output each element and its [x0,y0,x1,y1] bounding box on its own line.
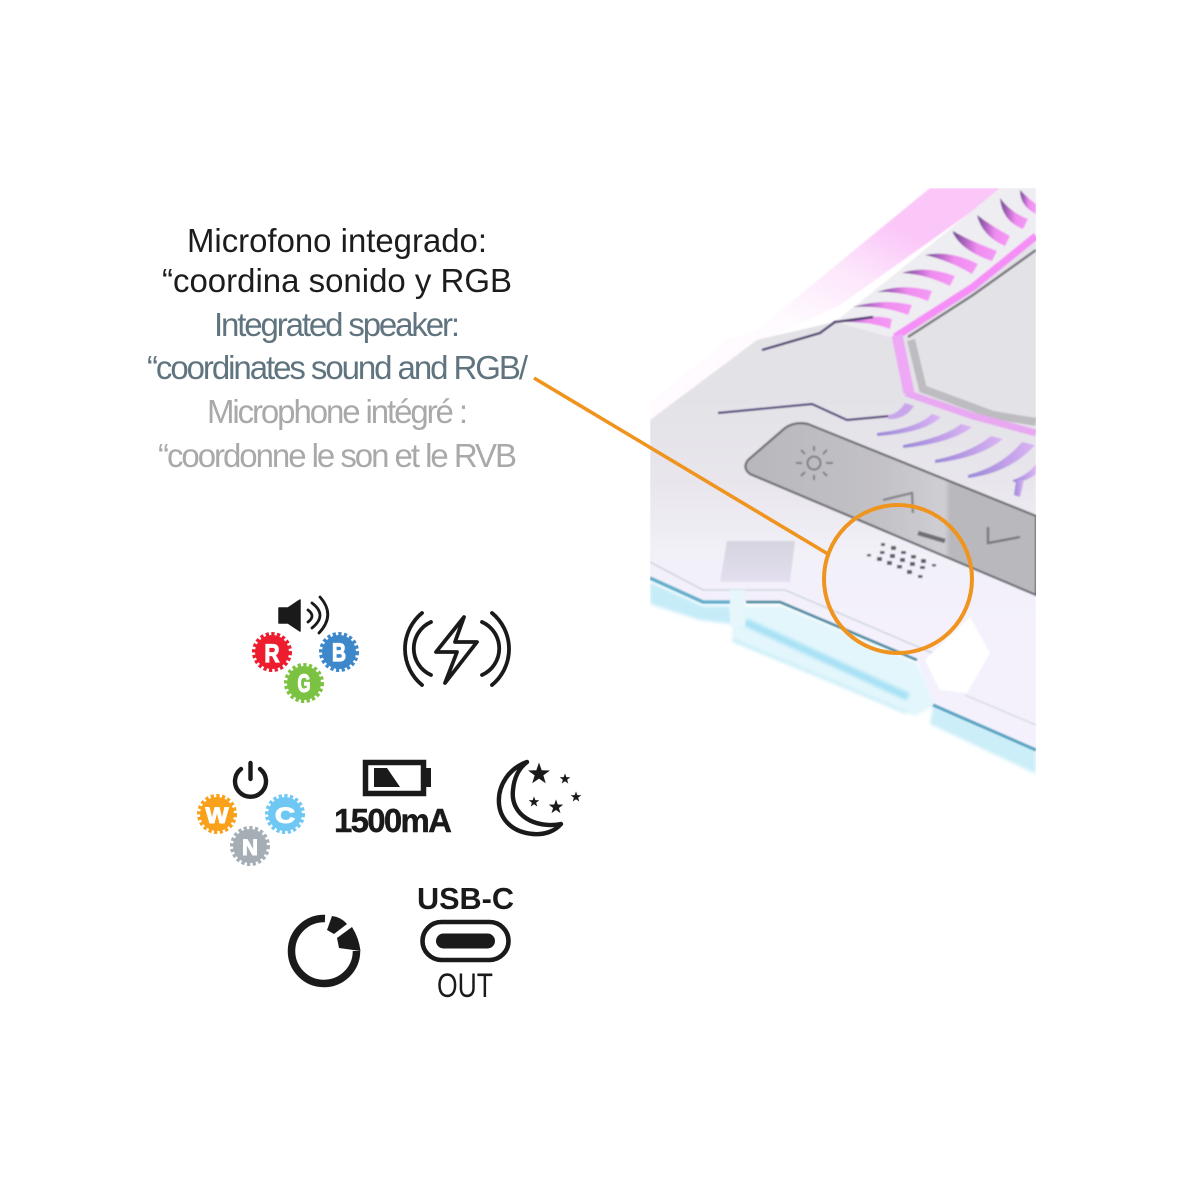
spanish caption [162,222,512,299]
edge highlight line right [965,695,1036,725]
B gear: B [332,639,346,667]
up arrow icon [883,493,913,513]
english caption: “coordinates sound and RGB/ [147,349,529,386]
translucent rubber foot [720,541,795,582]
icon: wireless charging bolt [405,613,509,685]
pink trim upper [895,236,1036,337]
blue lower glow [650,582,1036,774]
button panel [745,423,1036,595]
purple line lower [718,404,890,420]
icon: USB-C out port [417,881,514,1005]
dash mark [918,533,945,541]
vent streaks upper [837,190,1036,329]
spanish caption: “coordina sonido y RGB [162,262,512,299]
callout leader line [534,378,828,554]
icon: 1500mA battery [334,762,452,839]
white notch [925,617,990,693]
dark light strip [650,578,730,602]
text block: multilingual microphone caption [147,222,529,474]
icon: 1500mA battery: 1500mA [334,802,452,839]
edge highlight line [650,562,937,655]
english caption [147,306,529,386]
speaker [279,597,328,633]
pad body [650,196,1036,750]
central hex recess [908,250,1036,420]
purple line lilac end [888,403,914,419]
product photo: laptop cooling pad corner [650,188,1036,774]
clear light pillar [730,590,745,626]
icon: night mode moon and stars [499,762,581,834]
english caption: Integrated speaker: [214,306,460,343]
power symbol [235,763,266,797]
french caption: Microphone intégré : [207,393,468,430]
microphone holes [867,543,936,578]
french caption: “coordonne le son et le RVB [158,437,517,474]
icon: white light modes [199,763,303,864]
icon: sound-reactive RGB [254,597,357,701]
top pink glowing edge [789,188,1000,316]
G gear: G [298,670,310,698]
R gear: R [264,640,280,668]
french caption [158,393,517,474]
W gear: W [206,803,229,828]
callout circle around microphone [824,505,972,653]
pink trim lower [906,393,1036,433]
icon: dial [291,916,360,983]
N gear: N [242,835,258,860]
sun icon [796,446,833,480]
C gear: C [275,803,295,828]
purple line upper [762,317,873,350]
vent streaks lower [877,414,1036,497]
dark recess edge [908,250,1036,337]
pink trim side [897,335,909,393]
grey recess edge [911,340,1036,422]
spanish caption: Microfono integrado: [187,222,487,259]
icon: USB-C out port: USB-C [417,881,514,916]
vent band top [835,188,1036,338]
icon: USB-C out port: OUT [437,967,493,1005]
down arrow icon [988,527,1020,543]
